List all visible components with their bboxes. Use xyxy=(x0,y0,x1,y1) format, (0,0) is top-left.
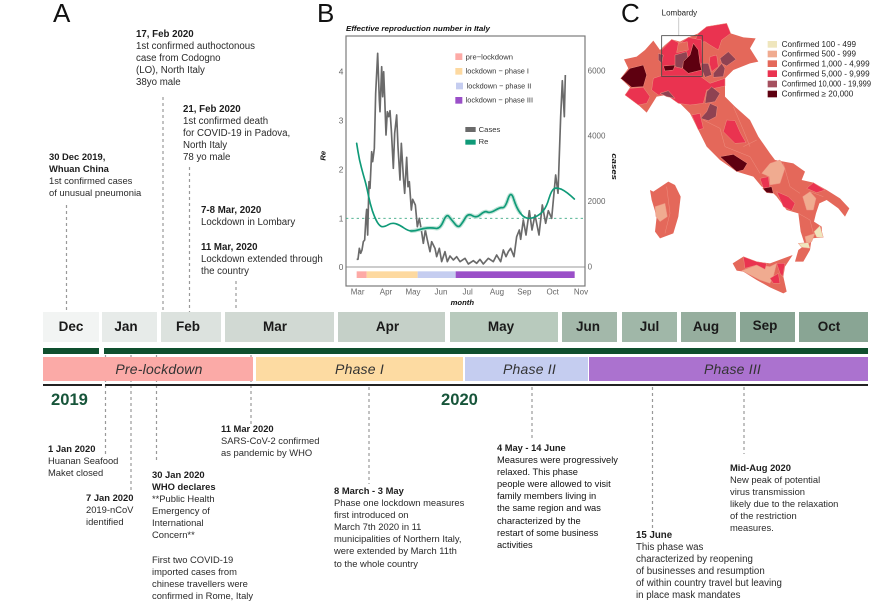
map legend: Confirmed 500 - 999 xyxy=(782,50,856,59)
phase legend: lockdown − phase III xyxy=(466,96,533,105)
event: Mid-Aug 2020: measures. xyxy=(730,522,774,533)
event: Mid-Aug 2020: Mid-Aug 2020 xyxy=(730,462,791,473)
map legend: Confirmed ≥ 20,000 xyxy=(782,90,854,99)
phase legend: pre−lockdown xyxy=(466,52,513,61)
phase: phase II: Phase II xyxy=(503,361,556,377)
event: 21 Feb 2020 xyxy=(183,104,290,163)
month Apr xyxy=(338,312,445,342)
month Mar xyxy=(225,312,334,342)
event: 30 Jan 2020: **Public Health xyxy=(152,493,215,504)
black line 2019 xyxy=(43,384,102,386)
line legend: Re xyxy=(479,137,488,146)
event: 30 Dec 2019: of unusual pneumonia xyxy=(49,187,141,198)
province fills xyxy=(621,23,825,283)
event: Mid-Aug 2020: New peak of potential xyxy=(730,474,820,485)
event: 4 May - 14 June: restart of some business xyxy=(497,528,598,538)
event: 15 June: of businesses and resumption xyxy=(636,566,765,577)
x axis month labels: Mar xyxy=(351,287,365,296)
event: 8 March - 3 May: municipalities of Northern Italy, xyxy=(334,533,461,544)
event: 11 Mar 2020 lockdown: the country xyxy=(201,266,249,277)
month Oct xyxy=(799,312,868,342)
event: 1 Jan 2020: 1 Jan 2020 xyxy=(48,443,95,454)
event: 17 Feb 2020 xyxy=(136,29,255,88)
y axis title Re: Re xyxy=(319,150,328,161)
Re line with confidence band xyxy=(357,143,574,231)
event: 4 May - 14 June: characterized by the xyxy=(497,516,581,526)
map legend: Confirmed 5,000 - 9,999 xyxy=(782,69,870,78)
map legend xyxy=(768,40,871,99)
event: 15 June: 15 June xyxy=(636,530,672,541)
province border veins xyxy=(665,107,823,233)
x axis month labels: Nov xyxy=(574,287,588,296)
x axis month labels xyxy=(351,287,588,296)
y axis Re labels: 0 xyxy=(339,262,344,272)
event: 8 March - 3 May xyxy=(334,485,464,569)
event: 30 Dec 2019 xyxy=(49,151,142,198)
event: 21 Feb 2020: North Italy xyxy=(183,140,227,151)
Lombardy label: Lombardy xyxy=(662,8,697,17)
event: 15 June: of within country travel but leaving xyxy=(636,578,782,589)
event: 30 Jan 2020: chinese travellers were xyxy=(152,578,248,589)
x axis month labels: Apr xyxy=(380,287,393,296)
event: 7 Jan 2020: 7 Jan 2020 xyxy=(86,492,133,503)
month Jul: Jul xyxy=(640,319,659,334)
green timeline bar 2019 xyxy=(43,348,99,354)
month Sep: Sep xyxy=(753,318,777,333)
month Dec xyxy=(43,312,99,342)
event: 4 May - 14 June: people were allowed to visit xyxy=(497,479,611,489)
month timeline xyxy=(43,312,868,342)
event: 17 Feb 2020: (LO), North Italy xyxy=(136,65,205,76)
phase: pre-lockdown: Pre-lockdown xyxy=(115,361,203,377)
year 2020: 2020 xyxy=(441,390,478,409)
y axis title cases: cases xyxy=(610,153,619,180)
event: 30 Jan 2020: confirmed in Rome, Italy xyxy=(152,590,253,601)
month Feb: Feb xyxy=(176,319,200,334)
event: 30 Jan 2020: International xyxy=(152,517,204,528)
cases line xyxy=(357,53,565,264)
event: 21 Feb 2020: for COVID-19 in Padova, xyxy=(183,128,290,139)
event: 1 Jan 2020: Maket closed xyxy=(48,467,103,478)
phase: phase III: Phase III xyxy=(704,361,761,377)
month Jan: Jan xyxy=(114,319,138,334)
black line 2020 xyxy=(105,384,868,386)
event: 1 Jan 2020 xyxy=(48,443,118,478)
event: 7-8 Mar 2020: Lockdown in Lombary xyxy=(201,217,295,228)
event: 8 March - 3 May: to the whole country xyxy=(334,558,418,569)
event: 4 May - 14 June: activities xyxy=(497,540,533,550)
event: Mid-Aug 2020: of the restriction xyxy=(730,510,797,521)
Lombardy box xyxy=(662,36,702,76)
event: Mid-Aug 2020: likely due to the relaxation xyxy=(730,498,838,509)
event: 15 June xyxy=(636,530,782,601)
x axis month labels: May xyxy=(405,287,421,296)
y axis cases labels: 0 xyxy=(588,263,593,272)
phase: phase III xyxy=(589,357,868,381)
Sicily base xyxy=(733,255,793,293)
event: 15 June: in place mask mandates xyxy=(636,590,740,601)
event: Mid-Aug 2020: virus transmission xyxy=(730,486,805,497)
event: 17 Feb 2020: 38yo male xyxy=(136,77,181,88)
month Feb xyxy=(161,312,221,342)
phase: pre-lockdown xyxy=(43,357,253,381)
event: 7-8 Mar 2020 xyxy=(201,205,296,228)
event: 30 Jan 2020: WHO declares xyxy=(152,481,216,492)
y axis cases labels xyxy=(588,66,606,272)
phase legend xyxy=(455,52,533,105)
event: 30 Dec 2019: Whuan China xyxy=(49,163,109,174)
event: 4 May - 14 June: the same region and was xyxy=(497,503,601,513)
map legend: Confirmed 100 - 499 xyxy=(782,40,856,49)
event: 11 Mar 2020 pandemic xyxy=(221,423,319,458)
event: 15 June: characterized by reopening xyxy=(636,554,753,565)
map legend: Confirmed 1,000 - 4,999 xyxy=(782,59,870,68)
month Jul xyxy=(622,312,677,342)
y axis cases labels: 2000 xyxy=(588,197,606,206)
event: 15 June: This phase was xyxy=(636,542,703,553)
month Apr: Apr xyxy=(376,319,399,334)
green timeline bar 2020 xyxy=(104,348,868,354)
event: 11 Mar 2020 lockdown xyxy=(201,242,323,277)
phase strip xyxy=(357,271,575,278)
event: 17 Feb 2020: 1st confirmed authoctonous xyxy=(136,41,255,52)
event: 8 March - 3 May: first introduced on xyxy=(334,509,409,520)
event: 11 Mar 2020 lockdown: Lockdown extended through xyxy=(201,254,323,265)
event: 30 Dec 2019: 30 Dec 2019, xyxy=(49,151,105,162)
x axis title: month xyxy=(451,298,474,307)
x axis month labels: Aug xyxy=(490,287,504,296)
month May xyxy=(450,312,558,342)
event: 8 March - 3 May: were extended by March 11th xyxy=(334,545,457,556)
month Jun xyxy=(562,312,617,342)
line legend: Cases xyxy=(479,125,501,134)
event: 7 Jan 2020: identified xyxy=(86,516,124,527)
month Sep xyxy=(740,312,795,342)
event: 8 March - 3 May: 8 March - 3 May xyxy=(334,485,404,496)
event: 21 Feb 2020: 21, Feb 2020 xyxy=(183,104,241,115)
event: 7 Jan 2020: 2019-nCoV xyxy=(86,504,133,515)
chart title: Effective reproduction number in Italy xyxy=(346,24,491,33)
event: 8 March - 3 May: March 7th 2020 in 11 xyxy=(334,521,421,532)
x axis month labels: Jun xyxy=(435,287,447,296)
event: 11 Mar 2020 pandemic: SARS-CoV-2 confirmed xyxy=(221,435,319,446)
x axis month labels: Jul xyxy=(463,287,473,296)
x axis month labels: Sep xyxy=(517,287,532,296)
Sardinia base xyxy=(650,182,681,238)
event: 21 Feb 2020: 1st confirmed death xyxy=(183,116,268,127)
year 2019: 2019 xyxy=(51,390,88,409)
event: 30 Jan 2020: Concern** xyxy=(152,529,195,540)
event: 11 Mar 2020 pandemic: as pandemic by WHO xyxy=(221,447,312,458)
event: 4 May - 14 June: Measures were progressively xyxy=(497,455,618,465)
event: 7 Jan 2020 xyxy=(86,492,134,527)
plot frame xyxy=(346,36,585,286)
event: 4 May - 14 June: 4 May - 14 June xyxy=(497,443,566,453)
phase: phase I xyxy=(256,357,463,381)
event: 4 May - 14 June: relaxed. This phase xyxy=(497,467,578,477)
month Mar: Mar xyxy=(263,319,287,334)
event: 4 May - 14 June xyxy=(497,443,618,550)
y axis cases labels: 6000 xyxy=(588,66,606,75)
event: 4 May - 14 June: family members living in xyxy=(497,491,596,501)
event: 21 Feb 2020: 78 yo male xyxy=(183,152,230,163)
event: 30 Jan 2020: imported cases from xyxy=(152,566,237,577)
month Jan xyxy=(102,312,157,342)
phase: phase II xyxy=(465,357,588,381)
event: 1 Jan 2020: Huanan Seafood xyxy=(48,455,118,466)
y axis cases labels: 4000 xyxy=(588,132,606,141)
phase legend: lockdown − phase II xyxy=(467,81,531,90)
y axis Re labels xyxy=(339,67,344,272)
event: 11 Mar 2020 lockdown: 11 Mar, 2020 xyxy=(201,242,258,253)
event: Mid-Aug 2020 xyxy=(730,462,838,533)
event: 11 Mar 2020 pandemic: 11 Mar 2020 xyxy=(221,423,274,434)
mainland base xyxy=(621,23,849,262)
month Aug xyxy=(681,312,736,342)
month May: May xyxy=(488,319,514,334)
x axis month labels: Oct xyxy=(546,287,560,296)
event: 30 Jan 2020: First two COVID-19 xyxy=(152,554,233,565)
Lombardy connector xyxy=(677,17,680,36)
event: 30 Jan 2020 xyxy=(152,469,253,601)
event: 30 Dec 2019: 1st confirmed cases xyxy=(49,175,132,186)
y axis Re labels: 3 xyxy=(339,116,344,126)
y axis Re labels: 1 xyxy=(339,213,344,223)
event: 17 Feb 2020: 17, Feb 2020 xyxy=(136,29,194,40)
y axis Re labels: 4 xyxy=(339,67,344,77)
phase legend: lockdown − phase I xyxy=(466,66,529,75)
month Aug: Aug xyxy=(693,319,719,334)
month Dec: Dec xyxy=(59,319,83,334)
map legend: Confirmed 10,000 - 19,999 xyxy=(782,80,871,89)
month Oct: Oct xyxy=(818,319,840,334)
event: 7-8 Mar 2020: 7-8 Mar, 2020 xyxy=(201,205,261,216)
event: 30 Jan 2020: 30 Jan 2020 xyxy=(152,469,205,480)
line legend xyxy=(465,125,501,146)
event: 17 Feb 2020: case from Codogno xyxy=(136,53,221,64)
event: 30 Jan 2020: Emergency of xyxy=(152,505,210,516)
phase: phase I: Phase I xyxy=(335,361,384,377)
y axis Re labels: 2 xyxy=(339,164,344,174)
event: 8 March - 3 May: Phase one lockdown measures xyxy=(334,497,464,508)
month Jun: Jun xyxy=(576,319,600,334)
